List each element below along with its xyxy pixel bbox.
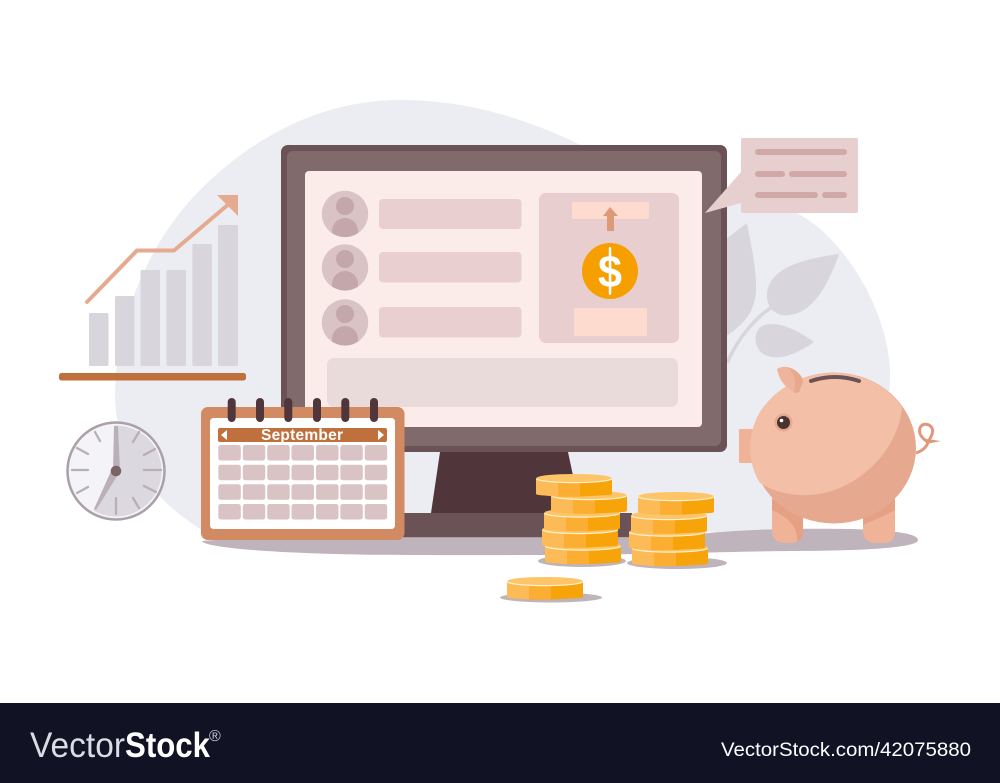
dollar coin: $ [598, 246, 622, 297]
dollar coin [582, 243, 638, 299]
monitor stand [431, 452, 581, 513]
footer band [0, 703, 1000, 783]
payment panel [539, 193, 679, 343]
piggy bank [739, 367, 941, 543]
brand logo: Stock [125, 726, 210, 765]
clock [68, 422, 164, 520]
trend arrow [87, 195, 238, 302]
coin slot [811, 377, 859, 381]
user row 1 [322, 191, 522, 237]
brand logo [30, 726, 221, 765]
background blob [115, 100, 890, 535]
screen [305, 171, 702, 427]
eye [774, 414, 792, 432]
monitor [281, 145, 727, 538]
speech bubble [705, 138, 858, 213]
image id: VectorStock.com/42075880 [721, 739, 971, 761]
legs [772, 495, 803, 543]
ear [777, 367, 803, 393]
user row 2 [322, 244, 522, 291]
brand logo: Vector [30, 726, 125, 765]
snout [739, 429, 754, 463]
calendar cells [218, 445, 387, 520]
wide bar [327, 358, 678, 407]
plant leaves [720, 223, 839, 363]
calendar rings [228, 398, 378, 422]
calendar header: September [261, 427, 343, 444]
user row 3 [322, 299, 522, 346]
up arrow [603, 207, 618, 231]
tail [916, 424, 941, 453]
body [752, 372, 916, 524]
monitor base [400, 513, 632, 538]
calendar [201, 398, 404, 540]
brand logo: ® [209, 728, 221, 745]
floor shadow [202, 529, 918, 555]
bar chart [59, 195, 246, 380]
calendar header [218, 427, 387, 444]
coin stack right [627, 492, 727, 569]
coin stack left [536, 474, 627, 567]
single coin [500, 577, 602, 602]
